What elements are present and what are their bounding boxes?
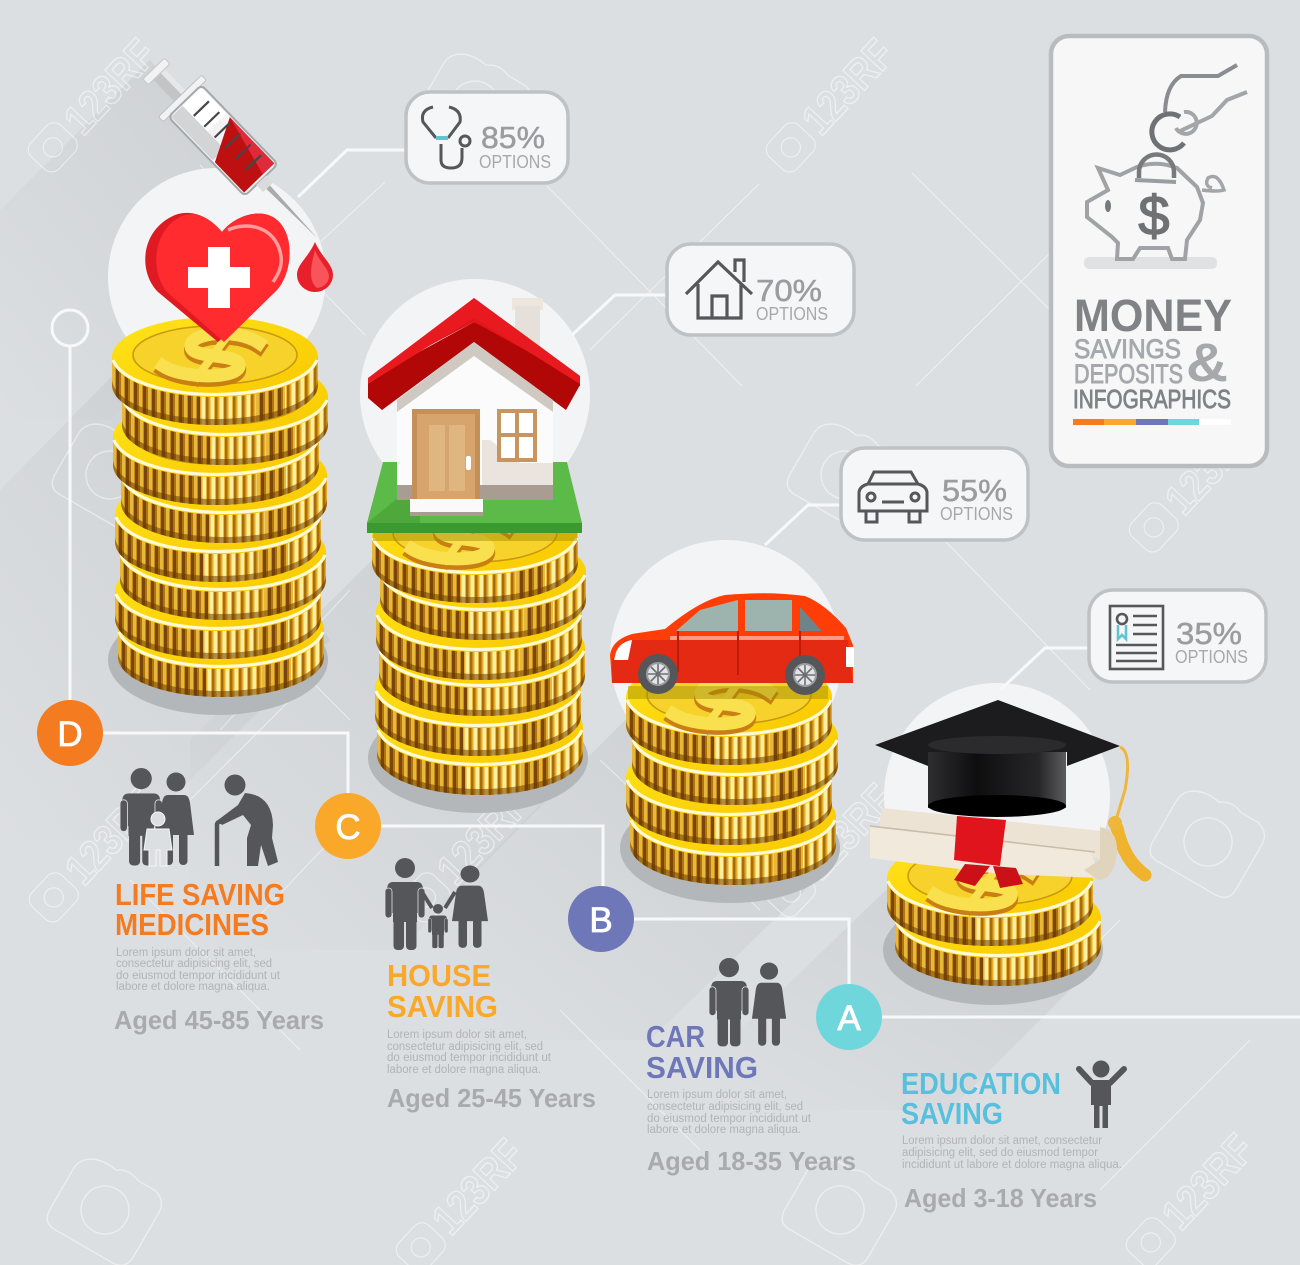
text: house saving: Aged 25-45 Years [387, 1083, 596, 1113]
icon: piggy bank [1087, 154, 1224, 259]
step D badge [37, 700, 103, 766]
icon: red car [610, 593, 854, 695]
icon: outline house [686, 260, 752, 318]
text: car saving: consectetur adipisicing elit, sed [647, 1101, 803, 1113]
callout: 55% car [841, 448, 1028, 540]
text: education saving: SAVING [901, 1096, 1003, 1131]
callout: 70% house [667, 244, 854, 335]
text: education saving: adipisicing elit, sed do eiusmod tempor [902, 1147, 1098, 1159]
text: house saving: labore et dolore magna aliqua. [387, 1064, 541, 1076]
title text [1073, 290, 1232, 414]
callout: 85% medical: OPTIONS [479, 152, 551, 172]
timeline start ring [52, 310, 88, 346]
title text: & [1186, 333, 1228, 393]
stack 4 coins [883, 838, 1103, 1005]
colour bar [1073, 419, 1231, 425]
text: house saving: Lorem ipsum dolor sit amet, [387, 1029, 527, 1041]
text: life saving medicines: do eiusmod tempor incididunt ut [116, 970, 281, 982]
text: house saving: do eiusmod tempor incididunt ut [387, 1052, 552, 1064]
title text: DEPOSITS [1074, 359, 1183, 389]
icon: family and elderly man [120, 768, 278, 866]
stack 1 coins [108, 317, 328, 715]
text: life saving medicines: MEDICINES [115, 907, 269, 942]
long shadows [0, 60, 1100, 1110]
text: car saving: do eiusmod tempor incididunt ut [647, 1113, 812, 1125]
icon: child with raised arms [1079, 1060, 1124, 1128]
text: education saving: EDUCATION [901, 1066, 1061, 1101]
icon: graduation cap and diploma [870, 700, 1145, 888]
text: house saving: SAVING [387, 989, 498, 1024]
text: house saving [387, 958, 596, 1113]
step D badge: D [57, 715, 83, 754]
text: life saving medicines: consectetur adipisicing elit, sed [116, 958, 272, 970]
text: education saving: Aged 3-18 Years [904, 1183, 1097, 1213]
icon: family [385, 858, 488, 950]
icon: heart with cross [145, 213, 290, 342]
callout: 35% education [1089, 590, 1266, 682]
text: life saving medicines: LIFE SAVING [115, 877, 285, 912]
callout: 85% medical [406, 92, 568, 183]
icon: certificate document [1110, 606, 1163, 669]
text: life saving medicines: Aged 45-85 Years [114, 1005, 324, 1035]
backdrop circles [108, 168, 1110, 909]
stack 2 coins [368, 495, 588, 813]
callout: 70% house: 70% [756, 273, 822, 308]
icon: house on green base [367, 298, 582, 533]
text: life saving medicines [114, 877, 324, 1035]
text: car saving [646, 1019, 856, 1176]
callout: 35% education: OPTIONS [1175, 647, 1248, 667]
pig base [1084, 257, 1217, 269]
step A badge [816, 984, 882, 1050]
callout: 55% car: 55% [942, 473, 1007, 508]
step C badge [315, 793, 381, 859]
callout: 35% education: 35% [1176, 616, 1242, 651]
step B badge: B [589, 901, 613, 940]
icon: couple [709, 958, 786, 1046]
icon: outline car [859, 472, 927, 522]
title text: INFOGRAPHICS [1073, 384, 1231, 414]
panel: money savings title card [1051, 36, 1267, 466]
text: car saving: Aged 18-35 Years [647, 1146, 856, 1176]
text: life saving medicines: labore et dolore magna aliqua. [116, 981, 270, 993]
text: car saving: labore et dolore magna aliqua. [647, 1124, 801, 1136]
callout: 85% medical: 85% [481, 120, 545, 155]
connector lines [70, 150, 1300, 1017]
text: life saving medicines: Lorem ipsum dolor sit amet, [116, 947, 256, 959]
callout: 55% car: OPTIONS [940, 504, 1013, 524]
text: education saving: Lorem ipsum dolor sit amet, consectetur [902, 1135, 1102, 1147]
icon: hand dropping coin [1152, 65, 1247, 150]
icon: syringe [132, 48, 339, 259]
title text: MONEY [1074, 290, 1232, 341]
callout: 70% house: OPTIONS [756, 304, 828, 324]
step B badge [568, 886, 634, 952]
text: car saving: CAR [646, 1019, 705, 1054]
text: house saving: consectetur adipisicing elit, sed [387, 1041, 543, 1053]
icon: blood drop [297, 242, 333, 292]
icon: dollar sign: $ [1138, 184, 1170, 247]
title text: SAVINGS [1074, 334, 1181, 364]
text: car saving: SAVING [646, 1050, 758, 1085]
text: house saving: HOUSE [387, 958, 491, 993]
text: education saving: incididunt ut labore et dolore magna aliqua. [902, 1159, 1122, 1171]
icon: stethoscope [422, 107, 470, 168]
text: education saving [901, 1066, 1122, 1213]
text: car saving: Lorem ipsum dolor sit amet, [647, 1089, 787, 1101]
stack 3 coins [620, 657, 840, 903]
step C badge: C [335, 808, 361, 847]
step A badge: A [837, 999, 861, 1038]
